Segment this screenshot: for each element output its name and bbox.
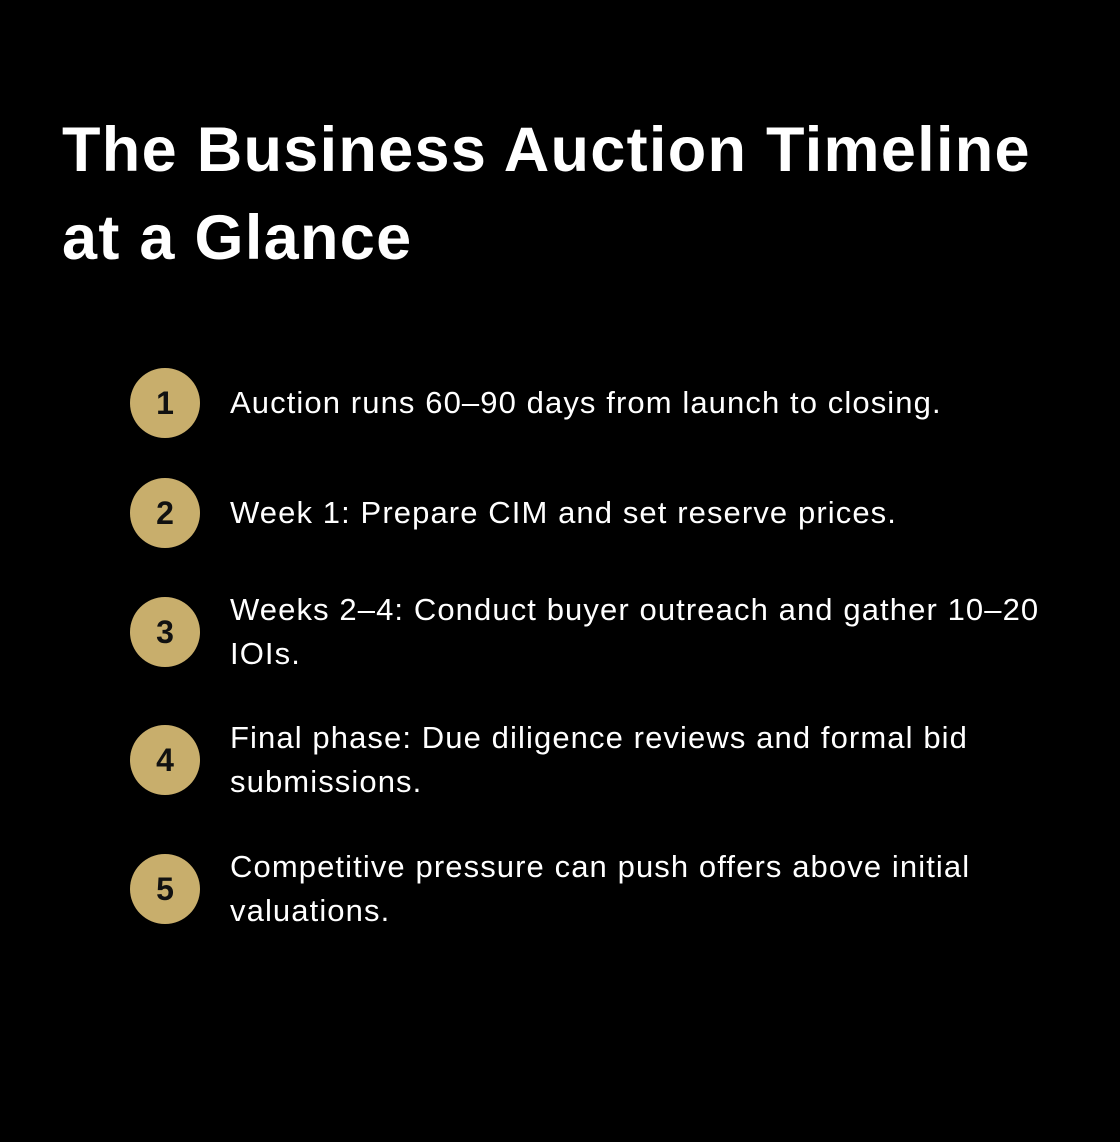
step 1 text: Auction runs 60–90 days from launch to closing. <box>230 385 942 420</box>
title: The Business Auction Timeline <box>62 115 1031 185</box>
step 4 <box>130 720 968 799</box>
step 2 text: Week 1: Prepare CIM and set reserve prices. <box>230 495 897 530</box>
title <box>62 115 1031 273</box>
step 2 <box>130 478 897 548</box>
step 5 <box>130 849 970 928</box>
step 5 text: Competitive pressure can push offers above initial <box>230 849 970 884</box>
step 3 text: Weeks 2–4: Conduct buyer outreach and gather 10–20 <box>230 592 1039 627</box>
number badge 1 <box>130 368 200 438</box>
number badge 2: 2 <box>156 495 174 531</box>
step 5 text <box>230 849 970 928</box>
step 3 text <box>230 592 1039 671</box>
step 5 text: valuations. <box>230 893 390 928</box>
number badge 1: 1 <box>156 385 174 421</box>
step 4 text: submissions. <box>230 764 422 799</box>
title: at a Glance <box>62 203 412 273</box>
number badge 5: 5 <box>156 871 174 907</box>
number badge 2 <box>130 478 200 548</box>
number badge 3: 3 <box>156 614 174 650</box>
step 4 text <box>230 720 968 799</box>
number badge 4: 4 <box>156 742 174 778</box>
number badge 5 <box>130 854 200 924</box>
step 1 <box>130 368 942 438</box>
number badge 3 <box>130 597 200 667</box>
step 4 text: Final phase: Due diligence reviews and formal bid <box>230 720 968 755</box>
step 3 <box>130 592 1039 671</box>
number badge 4 <box>130 725 200 795</box>
step 3 text: IOIs. <box>230 636 301 671</box>
